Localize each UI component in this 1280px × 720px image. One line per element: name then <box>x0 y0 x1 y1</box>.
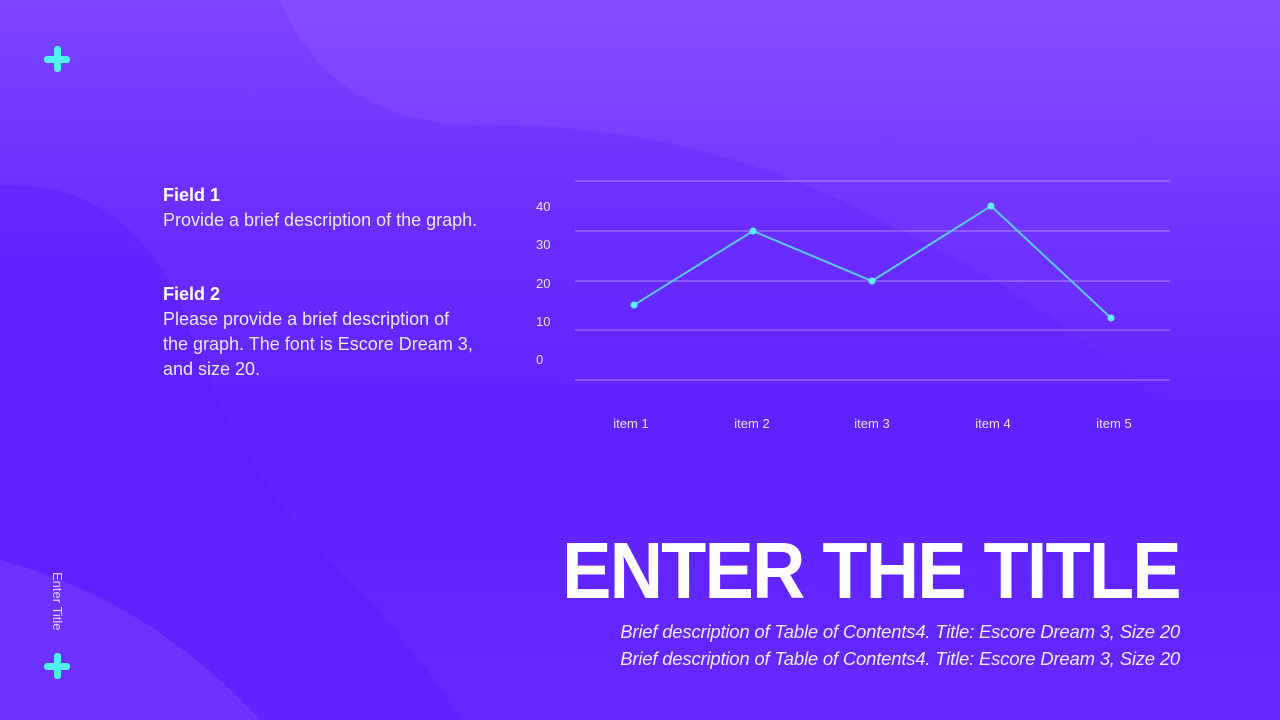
text block: field 1 <box>163 185 477 230</box>
line chart: 10 <box>536 314 550 329</box>
line chart: 40 <box>536 199 550 214</box>
line chart: 30 <box>536 237 550 252</box>
subtitle: Brief description of Table of Contents4. Title: Escore Dream 3, Size 20 <box>620 648 1180 669</box>
line chart: 20 <box>536 276 550 291</box>
line chart: item 4 <box>975 416 1011 431</box>
text block: field 1: Provide a brief description of the graph. <box>163 210 477 230</box>
subtitle: Brief description of Table of Contents4. Title: Escore Dream 3, Size 20 <box>620 621 1180 642</box>
line chart: item 1 <box>613 416 649 431</box>
title: ENTER THE TITLE <box>562 526 1180 615</box>
text block: field 2: Please provide a brief description of <box>163 309 449 329</box>
line chart: item 5 <box>1096 416 1132 431</box>
subtitle <box>620 621 1180 669</box>
line chart: item 2 <box>734 416 770 431</box>
text block: field 1: Field 1 <box>163 185 220 205</box>
icon: plus bottom <box>44 653 70 679</box>
text block: field 2 <box>163 284 473 379</box>
text block: field 2: and size 20. <box>163 359 260 379</box>
icon: plus top <box>44 46 70 72</box>
line chart: item 3 <box>854 416 890 431</box>
line chart: 0 <box>536 352 543 367</box>
text block: field 2: Field 2 <box>163 284 220 304</box>
text block: field 2: the graph. The font is Escore Dream 3, <box>163 334 473 354</box>
vertical label: Enter Title <box>50 572 65 631</box>
